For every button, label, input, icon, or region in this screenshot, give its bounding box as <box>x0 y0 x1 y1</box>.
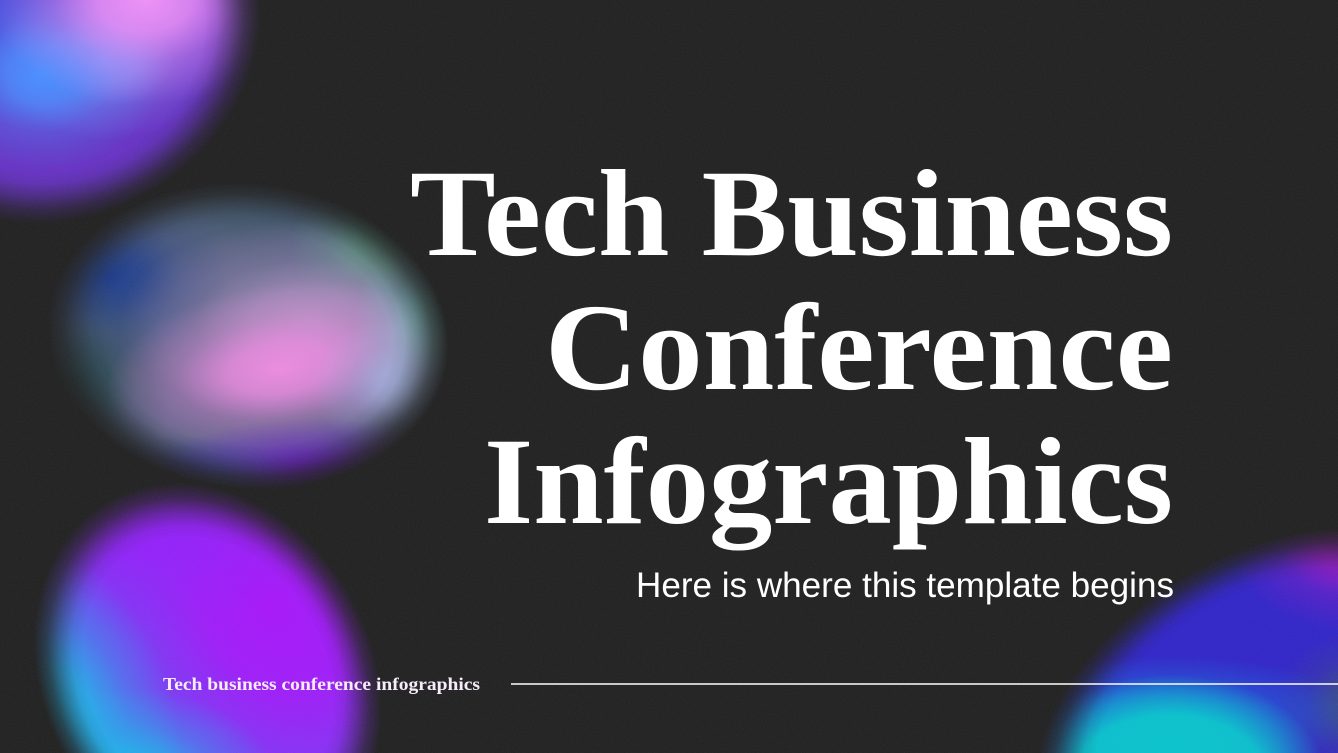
blob: centre-left gradient <box>54 188 446 487</box>
blob: top-left gradient <box>0 0 258 221</box>
subtitle: Here is where this template begins <box>636 566 1174 605</box>
blob: bottom-left gradient <box>36 486 380 753</box>
title line 1: Tech Business <box>410 145 1173 282</box>
title line 3: Infographics <box>484 413 1173 551</box>
footer label: Tech business conference infographics <box>163 674 480 694</box>
title <box>410 145 1173 551</box>
title line 2: Conference <box>545 279 1173 416</box>
footer rule <box>511 683 1338 685</box>
blob: bottom-right gradient <box>1042 532 1338 753</box>
